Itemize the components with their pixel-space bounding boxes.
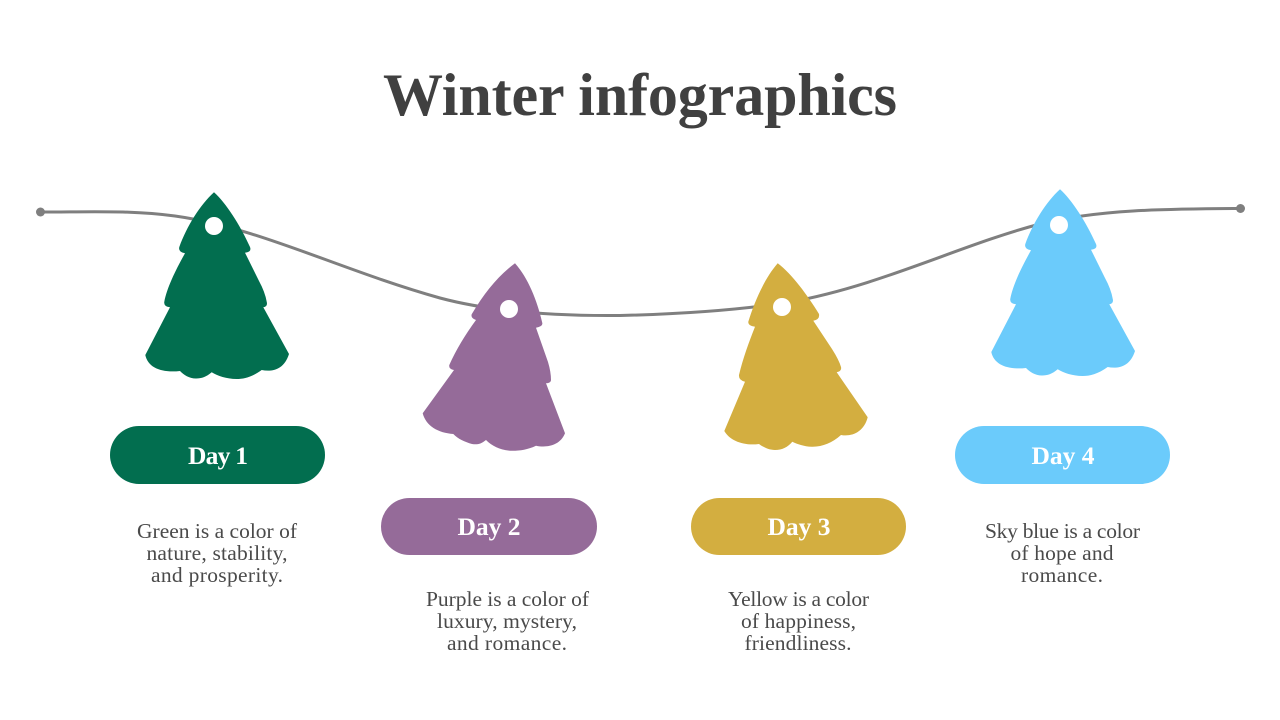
garland string [36, 204, 1245, 316]
text: day 4 description [985, 519, 1140, 587]
text: day 2 description: and romance. [447, 631, 567, 655]
text: day 2 description: luxury, mystery, [437, 609, 577, 633]
title: Winter infographics [383, 62, 897, 128]
pill: Day 4 [955, 426, 1170, 484]
pill: Day 3 [691, 498, 906, 555]
pill: Day 1: Day 1 [188, 441, 248, 470]
text: day 3 description: of happiness, [741, 609, 856, 633]
pill: Day 3: Day 3 [768, 512, 830, 541]
text: day 2 description [426, 587, 590, 655]
text: day 1 description: and prosperity. [151, 563, 283, 587]
pill: Day 2: Day 2 [458, 512, 520, 541]
text: day 3 description: Yellow is a color [728, 587, 869, 611]
text: day 3 description [728, 587, 869, 655]
text: day 2 description: Purple is a color of [426, 587, 590, 611]
text: day 1 description: nature, stability, [146, 541, 288, 565]
text: day 4 description: romance. [1021, 563, 1103, 587]
text: day 4 description: of hope and [1010, 541, 1114, 565]
text: day 1 description [137, 519, 298, 587]
tree: purple [423, 263, 565, 451]
pill: Day 1 [110, 426, 325, 484]
text: day 1 description: Green is a color of [137, 519, 298, 543]
text: day 3 description: friendliness. [744, 631, 852, 655]
pill: Day 2 [381, 498, 597, 555]
tree: green [145, 192, 289, 379]
text: day 4 description: Sky blue is a color [985, 519, 1140, 543]
pill: Day 4: Day 4 [1032, 441, 1095, 470]
tree: sky blue [991, 189, 1135, 376]
tree: yellow [724, 263, 868, 450]
